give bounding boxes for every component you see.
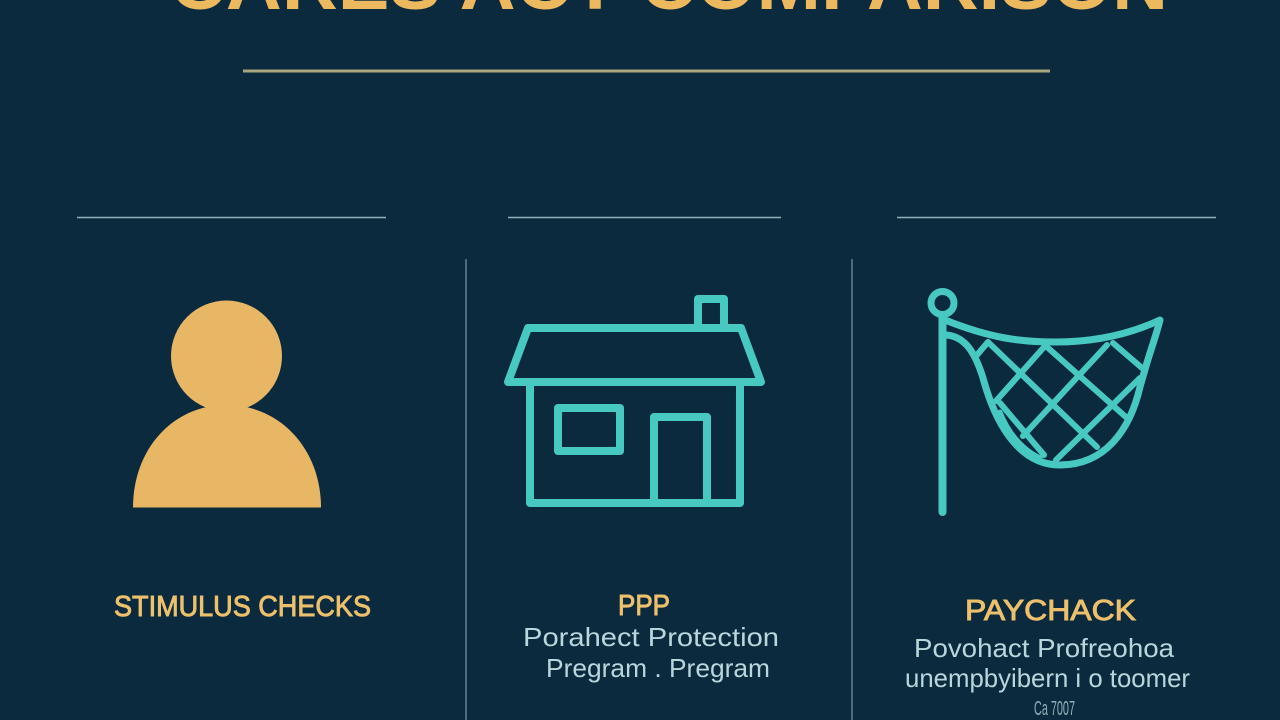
text block: PPP description xyxy=(523,622,779,683)
text block: paycheck description xyxy=(905,633,1190,720)
text block: paycheck description: Povohact Profreohoa xyxy=(914,633,1175,663)
text block: PPP description: Porahect Protection xyxy=(523,622,779,652)
text block: paycheck description: Ca 7007 xyxy=(1034,698,1075,720)
panel: PPP xyxy=(508,299,779,683)
text block: paycheck description: unempbyibern i o toomer xyxy=(905,663,1190,693)
icon: person xyxy=(133,300,321,508)
text block: PPP description: Pregram . Pregram xyxy=(546,653,770,683)
icon: house xyxy=(508,299,761,503)
panel: stimulus checks xyxy=(114,300,371,623)
heading: paychack: PAYCHACK xyxy=(965,595,1137,627)
heading: stimulus checks: STIMULUS CHECKS xyxy=(114,591,371,623)
panel: paycheck xyxy=(905,292,1190,720)
icon: safety net on pole xyxy=(931,292,1160,512)
heading: PPP: PPP xyxy=(618,590,670,622)
